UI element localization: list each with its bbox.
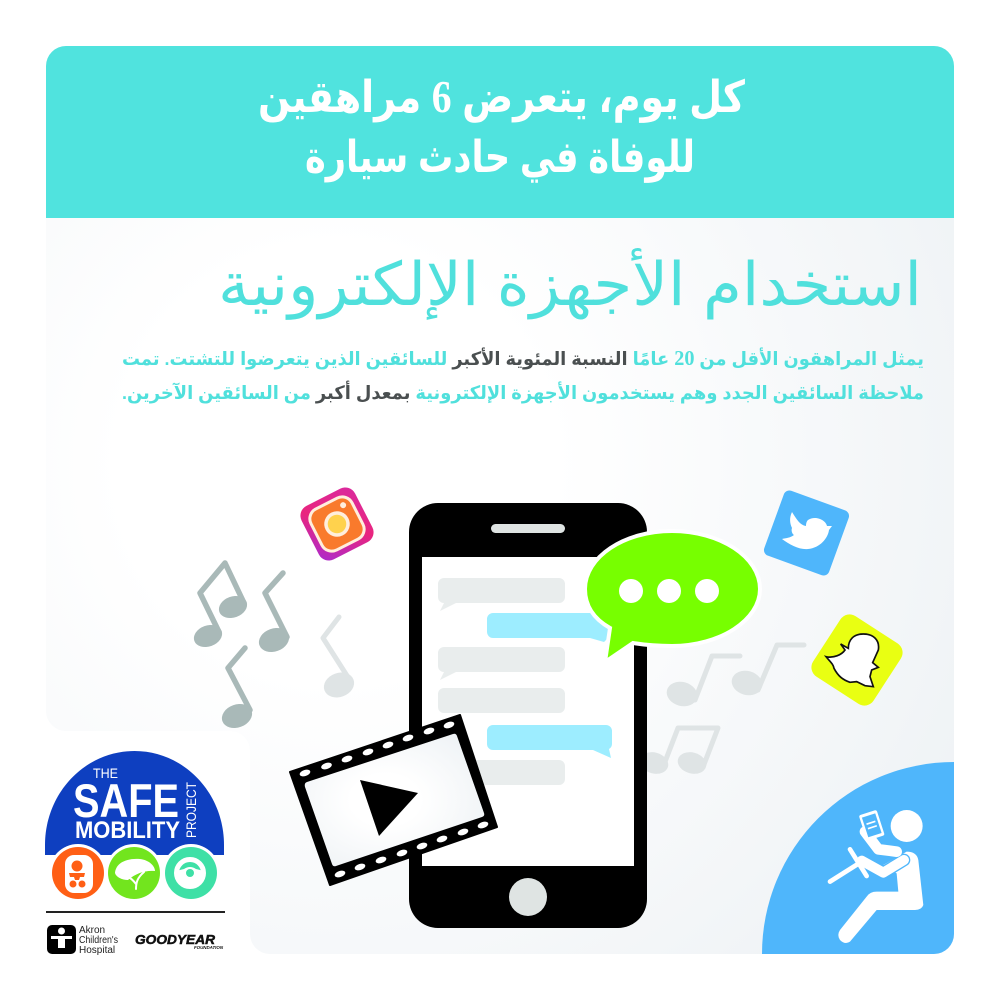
text block: description <box>122 346 924 404</box>
chat bubbles <box>438 578 565 785</box>
screen <box>422 557 634 866</box>
text block: description: ملاحظة السائقين الجدد وهم يستخدمون الأجهزة الإلكترونية بمعدل أكبر من السائقين الآخرين. <box>122 381 924 404</box>
logo: goodyear foundation: GOODYEAR <box>135 932 216 947</box>
icon: instagram <box>297 484 377 564</box>
logo: safe mobility project: THE <box>93 765 118 781</box>
icon: smartphone with chat <box>409 503 647 928</box>
icon: snapchat <box>807 610 907 710</box>
logo: akron children's hospital: Hospital <box>79 945 115 956</box>
logo: safe mobility project <box>45 751 224 902</box>
title: للوفاة في حادث سيارة <box>305 133 695 183</box>
icon: light music notes <box>320 617 804 777</box>
icon: dark music notes <box>191 563 292 732</box>
icon: distracted driver corner <box>762 762 954 954</box>
icon: green speech bubble <box>585 531 760 662</box>
logo: akron children's hospital <box>47 925 118 956</box>
icon: car seat <box>49 844 107 902</box>
logo: safe mobility project: SAFE <box>73 774 179 827</box>
heading: استخدام الأجهزة الإلكترونية <box>218 248 922 320</box>
logo: akron children's hospital: Akron <box>79 925 105 936</box>
icon: twitter <box>762 489 851 577</box>
icon: helmet <box>105 844 163 902</box>
text block: description: يمثل المراهقون الأقل من 20 عامًا النسبة المئوية الأكبر للسائقين الذين يتعرضوا للتشتت. تمت <box>122 346 924 370</box>
divider line <box>46 911 225 913</box>
logo: akron children's hospital: Children's <box>79 935 118 946</box>
speaker <box>491 524 565 533</box>
panel: white logo tab <box>40 711 270 960</box>
title <box>258 71 745 183</box>
logo: goodyear foundation: FOUNDATION <box>194 945 224 950</box>
icon: steering wheel <box>162 844 220 902</box>
icon: film strip with play <box>290 715 497 885</box>
logo: safe mobility project: PROJECT <box>183 782 199 838</box>
home button <box>509 878 547 916</box>
panel: teal header <box>46 46 954 218</box>
title: كل يوم، يتعرض 6 مراهقين <box>258 71 745 123</box>
logo: safe mobility project: MOBILITY <box>75 817 180 844</box>
